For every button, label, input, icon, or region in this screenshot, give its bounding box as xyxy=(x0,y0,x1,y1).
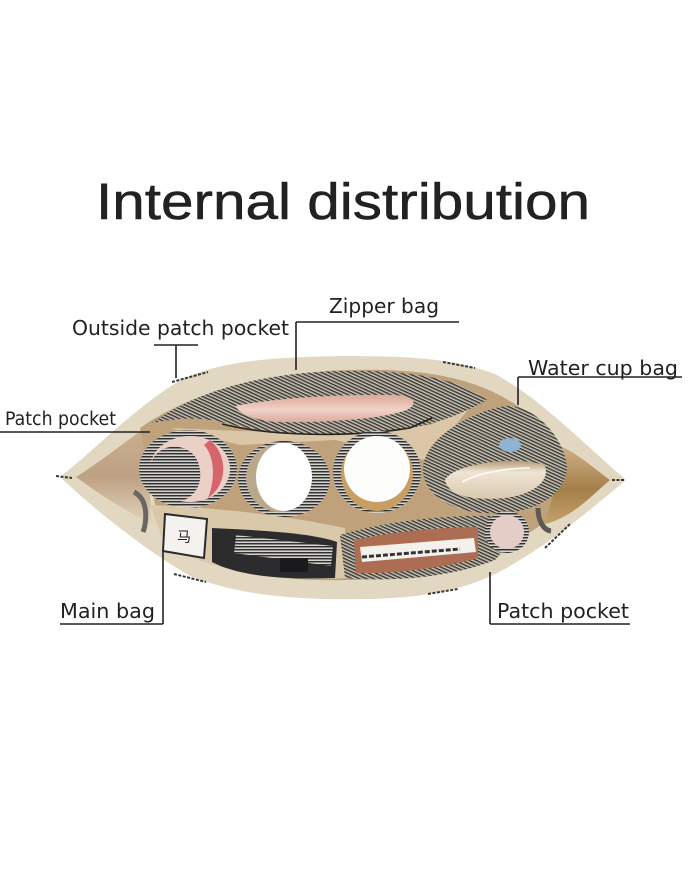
brown case xyxy=(354,527,478,573)
organizer bag illustration xyxy=(56,356,626,599)
compact mirror xyxy=(485,511,529,553)
water cup bag xyxy=(423,406,567,513)
water cup xyxy=(445,461,546,499)
front patch pocket xyxy=(340,511,529,579)
inner right wall xyxy=(540,446,610,525)
label: Zipper bag: Zipper bag xyxy=(329,294,439,318)
label: Main bag: Main bag xyxy=(60,599,155,623)
label: Outside patch pocket: Outside patch pocket xyxy=(72,316,289,340)
inner left wall xyxy=(76,428,152,525)
round cup pocket 2 xyxy=(333,431,421,513)
zipper bag pink contents xyxy=(235,395,414,422)
edge stitching specks xyxy=(56,362,624,594)
main bag xyxy=(150,505,345,579)
label: Outside patch pocket xyxy=(72,316,289,378)
left round pocket with patterned cup xyxy=(139,430,237,508)
label: Patch pocket right xyxy=(490,572,630,624)
inner bag floor xyxy=(140,370,565,580)
round cup pocket 1 xyxy=(238,441,330,517)
label: Patch pocket right: Patch pocket xyxy=(497,599,629,623)
zipper bag xyxy=(152,371,487,434)
label: Water cup bag xyxy=(518,356,682,405)
label: Water cup bag: Water cup bag xyxy=(528,356,678,380)
side loop right xyxy=(538,508,551,531)
bag outer felt shell xyxy=(60,356,626,599)
white card in case xyxy=(360,538,476,562)
main bag: 马 xyxy=(177,527,191,547)
title: Internal distribution xyxy=(96,173,590,230)
label: Zipper bag xyxy=(296,294,459,370)
tan divider band xyxy=(170,408,470,460)
label: Main bag xyxy=(60,552,163,624)
blue item xyxy=(499,438,521,452)
side loop left xyxy=(134,492,146,532)
label: Patch pocket left: Patch pocket xyxy=(5,409,116,430)
black wallet xyxy=(212,528,337,579)
white card xyxy=(163,514,207,558)
